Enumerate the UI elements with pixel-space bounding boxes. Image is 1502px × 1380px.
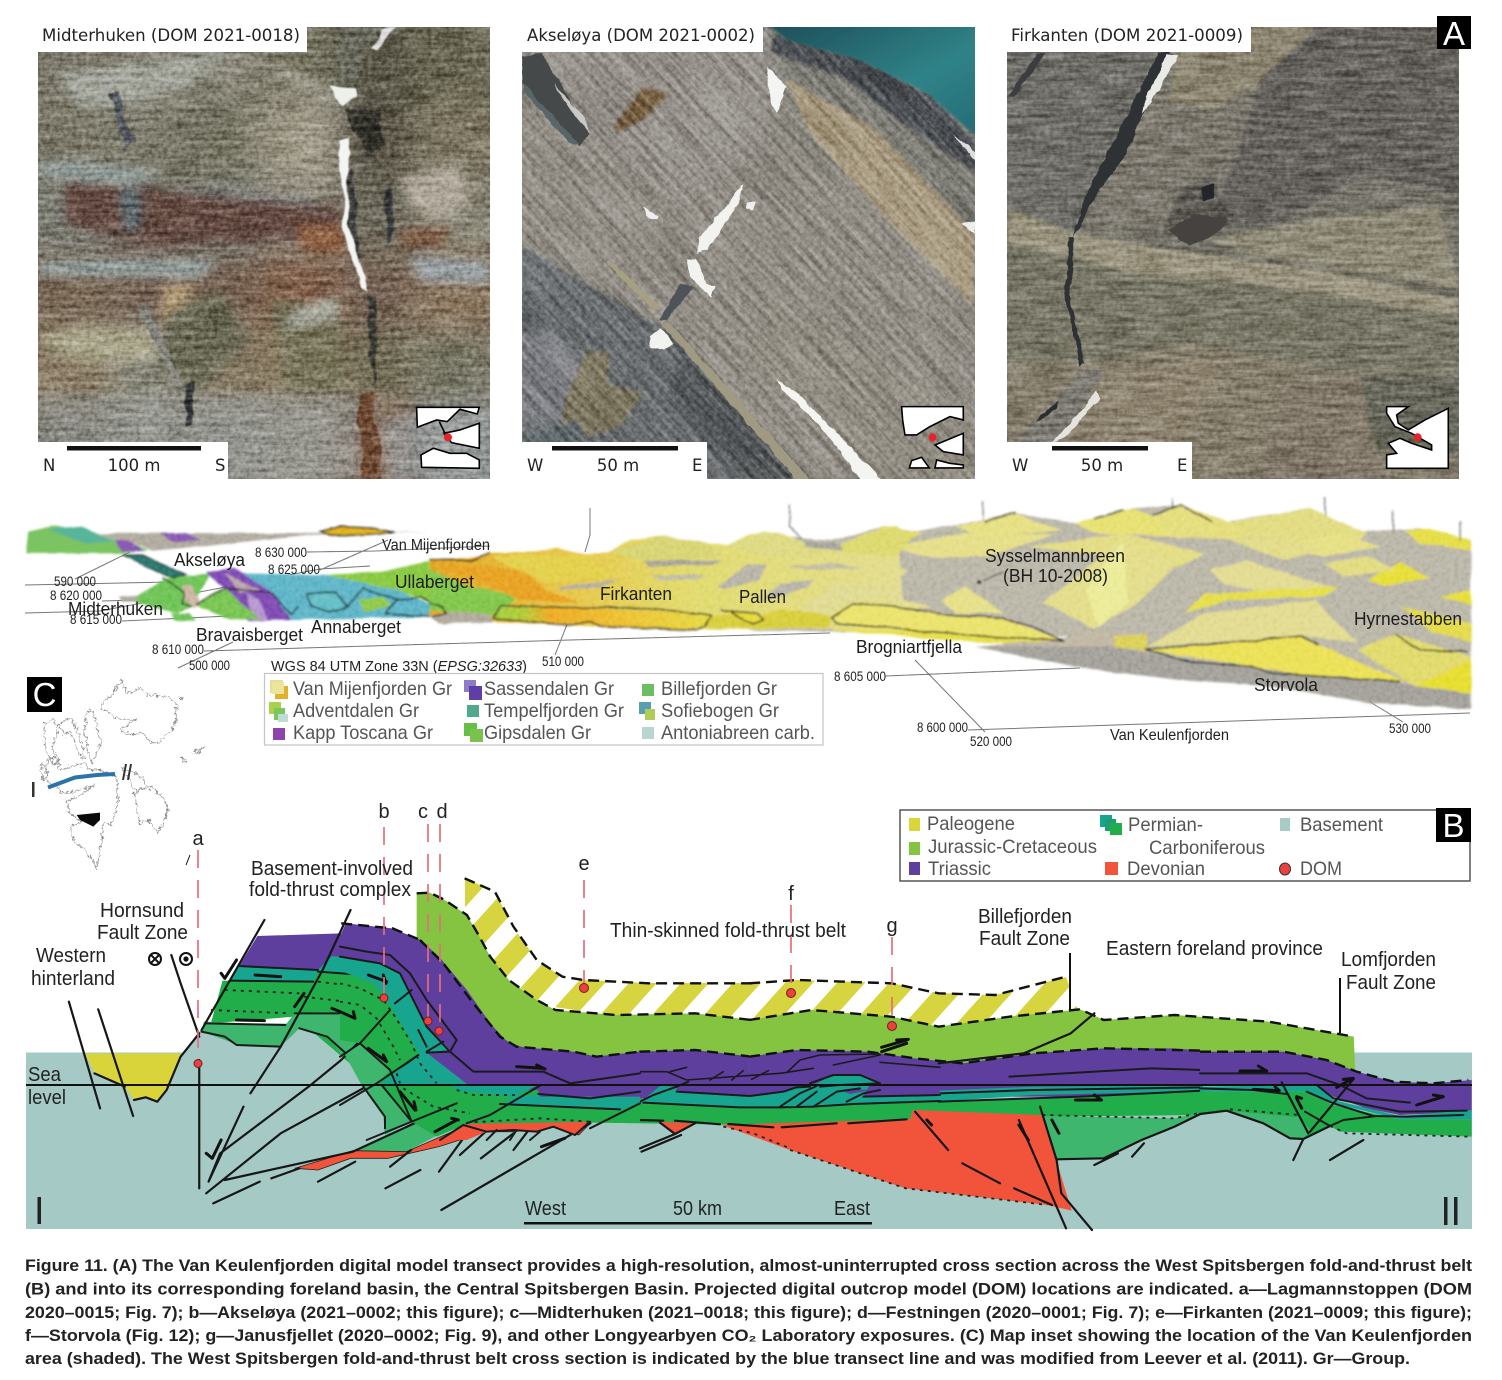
scale bar: 50 m <box>597 456 639 475</box>
swatch: Gipsdalen <box>464 723 483 742</box>
map labels: Pallen <box>739 586 786 607</box>
swatch: Tempelfjorden <box>467 705 479 717</box>
scale bar: E <box>1177 456 1187 475</box>
section labels: Fault Zone <box>97 922 188 944</box>
swatch: Sofiebogen <box>639 702 655 720</box>
scale bar: E <box>692 456 702 475</box>
scale bar: 50 m <box>1081 456 1123 475</box>
icon: location inset <box>902 407 963 468</box>
panel: Firkanten outcrop photo <box>1007 26 1460 480</box>
legend text <box>927 813 1384 880</box>
map labels: Van Keulenfjorden <box>1110 727 1229 744</box>
map outline <box>41 680 205 870</box>
map labels: Hyrnestabben <box>1354 608 1462 629</box>
map labels: Annaberget <box>311 616 401 637</box>
map labels: 520 000 <box>970 734 1012 749</box>
section labels: a <box>192 828 204 850</box>
section labels: Hornsund <box>100 900 184 922</box>
panel: 3D terrain model <box>25 497 1472 749</box>
swatch: Adventdalen <box>269 702 288 722</box>
fault zone tick lines <box>1070 953 1340 1033</box>
DOM location dashes <box>198 824 892 1060</box>
map labels: Ullaberget <box>395 571 474 592</box>
figure caption: f—Storvola (Fig. 12); g—Janusfjellet (2020–0002; Fig. 9), and other Longyearbyen CO₂ Laboratory exposures. (C) Map inset showing the location of the Van Keulenfjorden <box>25 1327 1472 1345</box>
legend text: Billefjorden Gr <box>661 678 777 700</box>
section labels: level <box>28 1087 66 1109</box>
map labels: Firkanten <box>600 583 672 604</box>
scale bar: W <box>1012 456 1028 475</box>
map labels: Sysselmannbreen <box>985 545 1125 566</box>
scale bar: 50 km <box>673 1198 722 1220</box>
legend text: Gipsdalen Gr <box>484 722 591 744</box>
scale bar <box>524 1198 872 1224</box>
legend text: Kapp Toscana Gr <box>293 722 433 744</box>
section labels: Thin-skinned fold-thrust belt <box>610 920 846 942</box>
section labels: Basement-involved <box>251 858 413 880</box>
scale bar: East <box>834 1198 870 1220</box>
map labels <box>50 537 1462 749</box>
map labels: Akseløya <box>174 549 246 570</box>
scale bar <box>37 442 228 479</box>
panel: C Svalbard location map <box>27 676 205 870</box>
map labels: Storvola <box>1254 674 1319 695</box>
figure caption: Figure 11. (A) The Van Keulenfjorden digital model transect provides a high-resolution, almost-uninterrupted cross section across the West Spitsbergen fold-and-thrust belt <box>25 1257 1473 1275</box>
map labels: 530 000 <box>1389 721 1431 736</box>
photo label <box>1007 26 1251 52</box>
swatch: Sassendalen <box>464 680 482 700</box>
map labels: 590 000 <box>54 574 96 589</box>
section labels: g <box>886 915 898 937</box>
hill: Brogniartfjella <box>831 603 1063 641</box>
swatch: Antoniabreen <box>642 727 654 739</box>
legend text: Basement <box>1300 814 1384 836</box>
map labels: Midterhuken <box>68 598 163 619</box>
panel label A: A <box>1443 15 1465 52</box>
figure caption: (B) and into its corresponding foreland basin, the Central Spitsbergen Basin. Projected digital outcrop model (DOM) locations are indicated. a—Lagmannstoppen (DOM <box>25 1280 1472 1298</box>
legend text: Triassic <box>928 858 991 880</box>
map labels: Bravaisberget <box>196 624 303 645</box>
scale bar: S <box>215 456 225 475</box>
photo label <box>522 26 763 52</box>
scale bar: N <box>43 456 55 475</box>
swatch: Kapp Toscana <box>273 728 285 740</box>
figure caption: 2020–0015; Fig. 7); b—Akseløya (2021–0002; this figure); c—Midterhuken (2021–0018; this figure); d—Festningen (2020–0001; Fig. 7); e—Firkanten (2021–0009; this figure); <box>25 1304 1472 1322</box>
cross section detail: western fold <box>340 940 640 1140</box>
map labels: Van Mijenfjorden <box>382 537 490 554</box>
section labels: c <box>418 801 428 823</box>
swatch: Van Mijenfjorden <box>270 680 288 699</box>
scale bar: 100 m <box>108 456 160 475</box>
panel: Midterhuken outcrop photo <box>38 27 490 479</box>
DOM markers <box>194 984 896 1068</box>
panel label B: B <box>1442 807 1465 844</box>
photo label: Midterhuken (DOM 2021-0018) <box>42 26 300 45</box>
section labels: Western <box>36 945 106 967</box>
swatch: Billefjorden <box>642 684 654 696</box>
section labels: d <box>436 801 448 823</box>
icon: location inset <box>417 407 479 468</box>
panel: Akseloya outcrop photo <box>522 27 975 479</box>
map labels: 8 625 000 <box>268 562 320 577</box>
cross section detail: eastern end <box>1200 1052 1472 1160</box>
cross section east half <box>722 977 1355 1230</box>
map labels: 510 000 <box>542 654 584 669</box>
figure caption: area (shaded). The West Spitsbergen fold-and-thrust belt cross section is indicated by the blue transect line and was modified from Leever et al. (2011). Gr—Group. <box>25 1350 1410 1368</box>
section labels: e <box>578 853 590 875</box>
section labels: Fault Zone <box>1346 972 1436 994</box>
panel label B <box>1436 807 1471 844</box>
cross section detail: central fold <box>640 1039 940 1148</box>
photo label: Akseløya (DOM 2021-0002) <box>527 26 755 45</box>
cross section west half <box>69 878 752 1210</box>
legend text: DOM <box>1300 858 1342 880</box>
legend text: Paleogene <box>927 813 1015 835</box>
panel label A <box>1437 15 1471 52</box>
map labels: 8 600 000 <box>917 720 968 735</box>
section labels <box>28 801 1436 1109</box>
shaded area <box>77 813 100 827</box>
sea level line <box>26 1084 1472 1086</box>
transect end labels <box>32 764 132 797</box>
panel: B cross section <box>26 801 1472 1230</box>
section labels: Fault Zone <box>979 928 1070 950</box>
map labels: 8 605 000 <box>834 669 886 684</box>
map labels: (BH 10-2008) <box>1003 565 1108 586</box>
section labels: hinterland <box>31 968 115 990</box>
legend text <box>293 678 815 744</box>
strike-slip symbols <box>149 855 192 965</box>
legend text: Adventdalen Gr <box>293 700 419 722</box>
map labels: 8 610 000 <box>152 642 204 657</box>
photo label <box>38 26 307 52</box>
section labels: Eastern foreland province <box>1106 938 1323 960</box>
legend text: Jurassic-Cretaceous <box>928 836 1097 858</box>
map legend <box>264 658 823 745</box>
section legend <box>900 810 1470 881</box>
legend text: Permian- <box>1128 814 1203 836</box>
section end markers <box>38 1197 1458 1225</box>
section labels: Sea <box>28 1064 62 1086</box>
map labels: 8 620 000 <box>50 588 102 603</box>
scale bar <box>522 442 707 479</box>
grid lines <box>25 508 1470 732</box>
transect line <box>48 774 115 788</box>
map legend: WGS 84 UTM Zone 33N (EPSG:32633) <box>271 658 527 675</box>
section labels: Lomfjorden <box>1341 949 1436 971</box>
section labels: fold-thrust complex <box>249 879 411 901</box>
figure caption <box>25 1257 1473 1368</box>
photo label: Firkanten (DOM 2021-0009) <box>1011 26 1243 45</box>
terrain: central section <box>430 526 910 632</box>
legend text: Devonian <box>1127 858 1205 880</box>
legend text: Sofiebogen Gr <box>661 700 779 722</box>
legend text: Carboniferous <box>1149 837 1265 859</box>
legend text: Tempelfjorden Gr <box>484 700 624 722</box>
section labels: Billefjorden <box>978 906 1072 928</box>
basement <box>26 1052 1472 1229</box>
scale bar: West <box>525 1198 566 1220</box>
Paleogene hatch <box>465 878 1078 1035</box>
section labels: f <box>788 883 794 905</box>
terrain: eastern section <box>749 497 1471 708</box>
icon: location inset <box>1387 407 1448 468</box>
terrain relief texture <box>130 505 1472 710</box>
map labels: 8 615 000 <box>70 612 122 627</box>
scale bar: W <box>527 456 543 475</box>
section labels: b <box>378 801 390 823</box>
scale bar <box>1007 442 1192 479</box>
map labels: Brogniartfjella <box>856 636 963 657</box>
legend text: Van Mijenfjorden Gr <box>293 678 452 700</box>
legend text: Antoniabreen carb. <box>661 722 815 744</box>
terrain: western section <box>26 526 495 624</box>
legend text: Sassendalen Gr <box>484 678 614 700</box>
map labels: 500 000 <box>189 658 230 673</box>
map labels: 8 630 000 <box>255 545 307 560</box>
panel: C Svalbard location map: C <box>33 676 56 713</box>
